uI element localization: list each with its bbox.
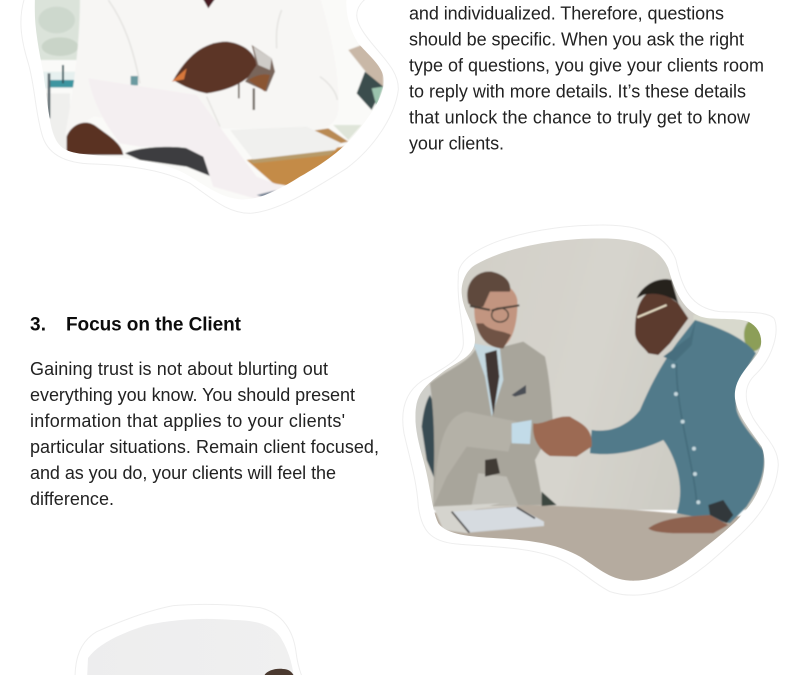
photo content [34, 0, 384, 198]
trouser shade [542, 492, 557, 506]
title: Focus on the Client [66, 314, 242, 336]
blob outline [75, 604, 303, 675]
line: to reply with more details. It’s these details [409, 82, 746, 102]
right hand on table [648, 515, 728, 533]
photo blob: handshake [400, 220, 800, 595]
blob outline [21, 0, 398, 213]
line: type of questions, you give your clients room [409, 56, 764, 76]
photo blob: man reviewing documents [0, 0, 400, 213]
desk [246, 145, 344, 186]
dark object [125, 147, 212, 177]
hair [264, 669, 294, 675]
line: difference. [30, 489, 114, 509]
raised hand [173, 42, 257, 93]
right edge objects [348, 45, 383, 87]
chair [420, 394, 436, 478]
window greenery [32, 0, 82, 60]
heading: Focus on the Client [30, 314, 242, 336]
left man suit [430, 342, 553, 507]
table [434, 504, 742, 581]
blob outline [403, 225, 778, 595]
line: and individualized. Therefore, questions [409, 4, 724, 24]
shirt buttons [671, 364, 700, 504]
line: particular situations. Remain client focused, [30, 437, 379, 457]
text block: focus on the client body [30, 359, 379, 509]
wristwatch [245, 45, 275, 92]
photo blob: next section, partially visible [75, 604, 315, 675]
watch [708, 500, 733, 523]
line: that unlock the chance to truly get to know [409, 108, 751, 128]
photo content [87, 619, 294, 675]
line: your clients. [409, 134, 504, 154]
shirt [72, 0, 82, 88]
right head [635, 288, 688, 355]
wall [422, 238, 764, 511]
lower left hand [67, 123, 123, 155]
photo content [416, 238, 764, 581]
line: Gaining trust is not about blurting out [30, 359, 328, 379]
line: information that applies to your clients' [30, 411, 345, 431]
shirt right man [590, 320, 764, 523]
line: and as you do, your clients will feel the [30, 463, 336, 483]
line: everything you know. You should present [30, 385, 355, 405]
plant [743, 322, 762, 352]
text block: questions continued [409, 4, 764, 154]
paper sheet [104, 84, 282, 198]
notebook [433, 503, 500, 533]
notebook [230, 127, 342, 160]
line: should be specific. When you ask the right [409, 30, 744, 50]
left head [474, 288, 518, 345]
number: 3. [30, 314, 46, 336]
handshake [533, 416, 592, 457]
cuff [512, 420, 532, 444]
